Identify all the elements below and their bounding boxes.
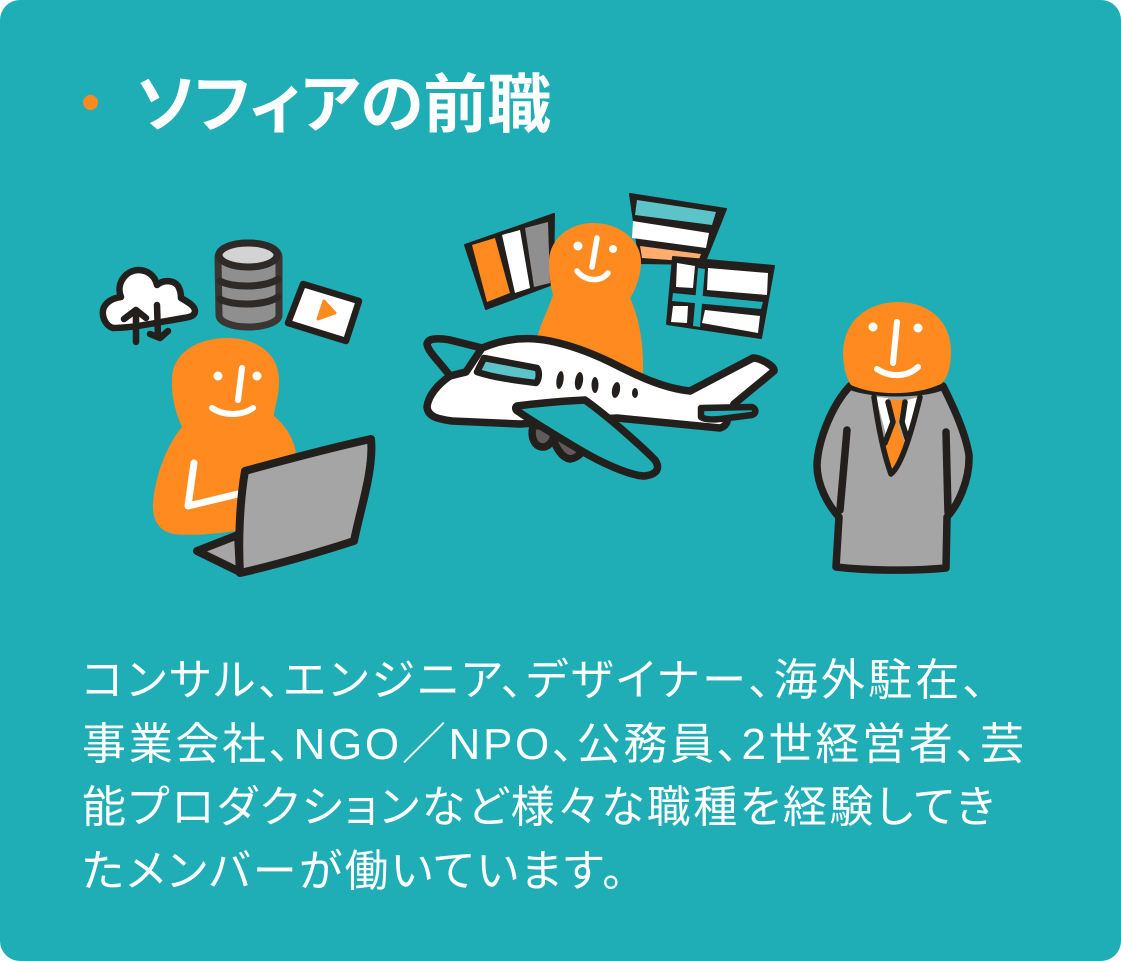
- person with laptop: [153, 338, 371, 573]
- airplane: [427, 339, 774, 476]
- engines: [532, 425, 585, 459]
- title: ソフィアの前職: [136, 69, 551, 141]
- head: [843, 302, 951, 393]
- body text: コンサル、エンジニア、デザイナー、海外駐在、: [82, 656, 988, 705]
- body: orange figure: [153, 338, 296, 535]
- body text: [82, 656, 1027, 896]
- tail fin: [427, 339, 482, 376]
- icon: cloud with up and down arrows: [103, 270, 195, 342]
- body text: 事業会社、NGO／NPO、公務員、2世経営者、芸: [82, 720, 1027, 769]
- fuselage: [427, 339, 774, 428]
- cockpit window: [477, 358, 539, 383]
- person in suit: [817, 302, 969, 570]
- wing: [516, 400, 658, 476]
- body: orange figure: [537, 223, 643, 375]
- flag: teal white orange: [630, 194, 726, 264]
- flag: white with teal cross: [667, 257, 774, 338]
- laptop: [197, 439, 371, 573]
- body text: 能プロダクションなど様々な職種を経験してき: [82, 783, 997, 832]
- shirt: [876, 397, 919, 438]
- icon: video player: [288, 284, 359, 341]
- collar lines: [874, 397, 920, 474]
- flag: orange white grey: [465, 214, 554, 309]
- icon: database: [218, 243, 279, 327]
- face: [868, 322, 922, 375]
- arm lines: [840, 430, 948, 512]
- side windows: [555, 371, 638, 399]
- bullet dot: [83, 95, 98, 110]
- person with plane: [537, 223, 643, 375]
- tie: [884, 400, 906, 469]
- body text: たメンバーが働いています。: [82, 847, 626, 896]
- stabilizer: [701, 407, 755, 419]
- face: [188, 368, 262, 506]
- suit: [817, 386, 969, 570]
- face: [574, 238, 617, 280]
